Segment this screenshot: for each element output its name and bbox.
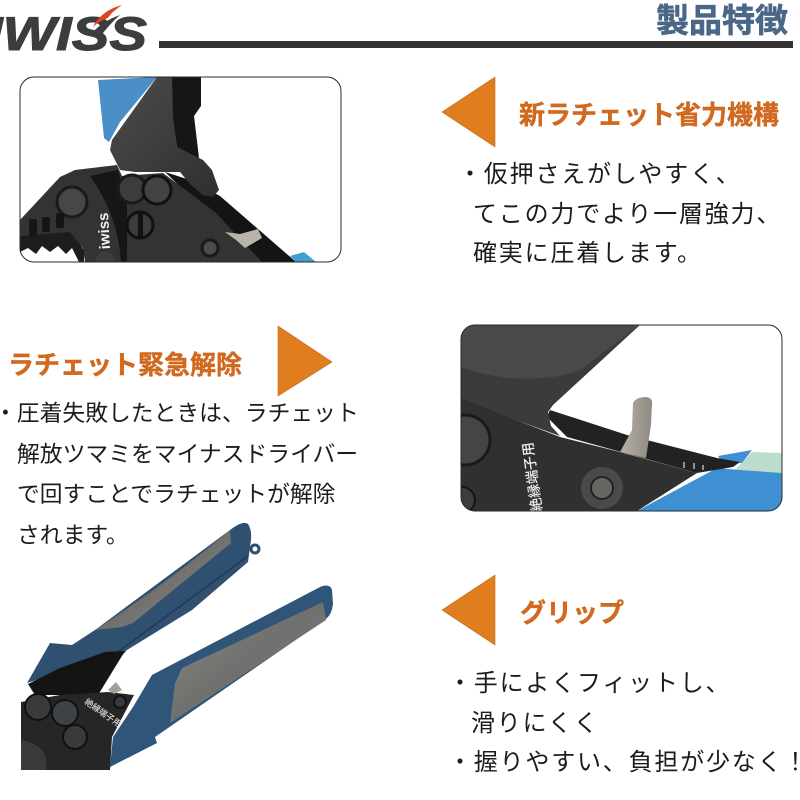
black handle strip [165, 172, 296, 262]
text block: new ratchet: ・仮押さえがしやすく、 [458, 161, 742, 188]
photo: crimping tool with blue and grey grips [21, 523, 333, 770]
rear pivot band [90, 170, 127, 262]
lanyard eyelet [251, 545, 259, 553]
heading: ratchet emergency release: ラチェット緊急解除 [8, 350, 242, 380]
engraved label: 絶縁端子用 [519, 441, 545, 513]
heading: new ratchet mechanism: 新ラチェット省力機構 [519, 100, 779, 130]
upper handle grey grip [95, 530, 231, 630]
jaw and plates [20, 165, 262, 262]
text block: ratchet release: ・圧着失敗したときは、ラチェット [0, 400, 359, 426]
text block: ratchet release: で回すことでラチェットが解除 [17, 481, 336, 507]
upper blue tip [718, 450, 752, 463]
black lever bar [170, 77, 201, 158]
metal release lever [620, 397, 652, 458]
black body plate [21, 692, 134, 770]
text block: grip [448, 670, 800, 776]
upper handle seam [118, 556, 248, 652]
header rule [159, 41, 793, 48]
text block: ratchet release: 解放ツマミをマイナスドライバー [17, 441, 358, 467]
rivets [25, 694, 51, 720]
heading: grip: グリップ [520, 598, 624, 628]
lower handle grey grip [170, 602, 326, 723]
text block: new ratchet [458, 161, 782, 267]
ratchet marks [684, 462, 703, 470]
text block: ratchet release: されます。 [17, 522, 129, 548]
text block: ratchet release [0, 400, 359, 548]
E clip rivet [581, 467, 623, 509]
blue handle tip [290, 252, 316, 262]
blue handle end [98, 77, 157, 142]
title: 製品特徴 [656, 2, 788, 39]
arrow: ratchet release [278, 326, 332, 396]
text block: new ratchet: てこの力でより一層強力、 [473, 201, 782, 228]
blue handle [637, 468, 782, 511]
photo panel 2 border [461, 325, 782, 511]
engraved label: 絶縁端子用 [83, 696, 123, 729]
black inner strip [547, 410, 740, 473]
jaw teeth [20, 232, 84, 262]
pale handle [736, 452, 782, 473]
jaw die holes [29, 219, 37, 236]
grey upper arm [461, 325, 640, 436]
photo panel: ratchet mechanism [20, 78, 316, 262]
rivets [57, 187, 87, 217]
text block: grip: 滑りにくく [471, 710, 600, 737]
upper handle blue [27, 523, 251, 683]
metal release lever [225, 229, 262, 248]
black plate [461, 398, 697, 511]
photo panel: ratchet release [440, 325, 782, 513]
lower handle blue [110, 586, 333, 767]
pivot rivet [462, 414, 492, 466]
text block: grip: ・握りやすい、負担が少なく！ [448, 749, 800, 776]
engraved brand: iwiss [95, 212, 114, 250]
metal lever [108, 682, 122, 694]
grey ratchet lever [110, 77, 219, 197]
jaw recess [21, 740, 46, 770]
lower rivet [462, 486, 476, 510]
arrow: new ratchet [442, 77, 495, 147]
photo panel 1 border [20, 77, 341, 262]
black wedge [28, 651, 125, 695]
arrow: grip [442, 575, 495, 645]
text block: grip: ・手によくフィットし、 [448, 670, 731, 697]
text block: new ratchet: 確実に圧着します。 [473, 240, 703, 267]
